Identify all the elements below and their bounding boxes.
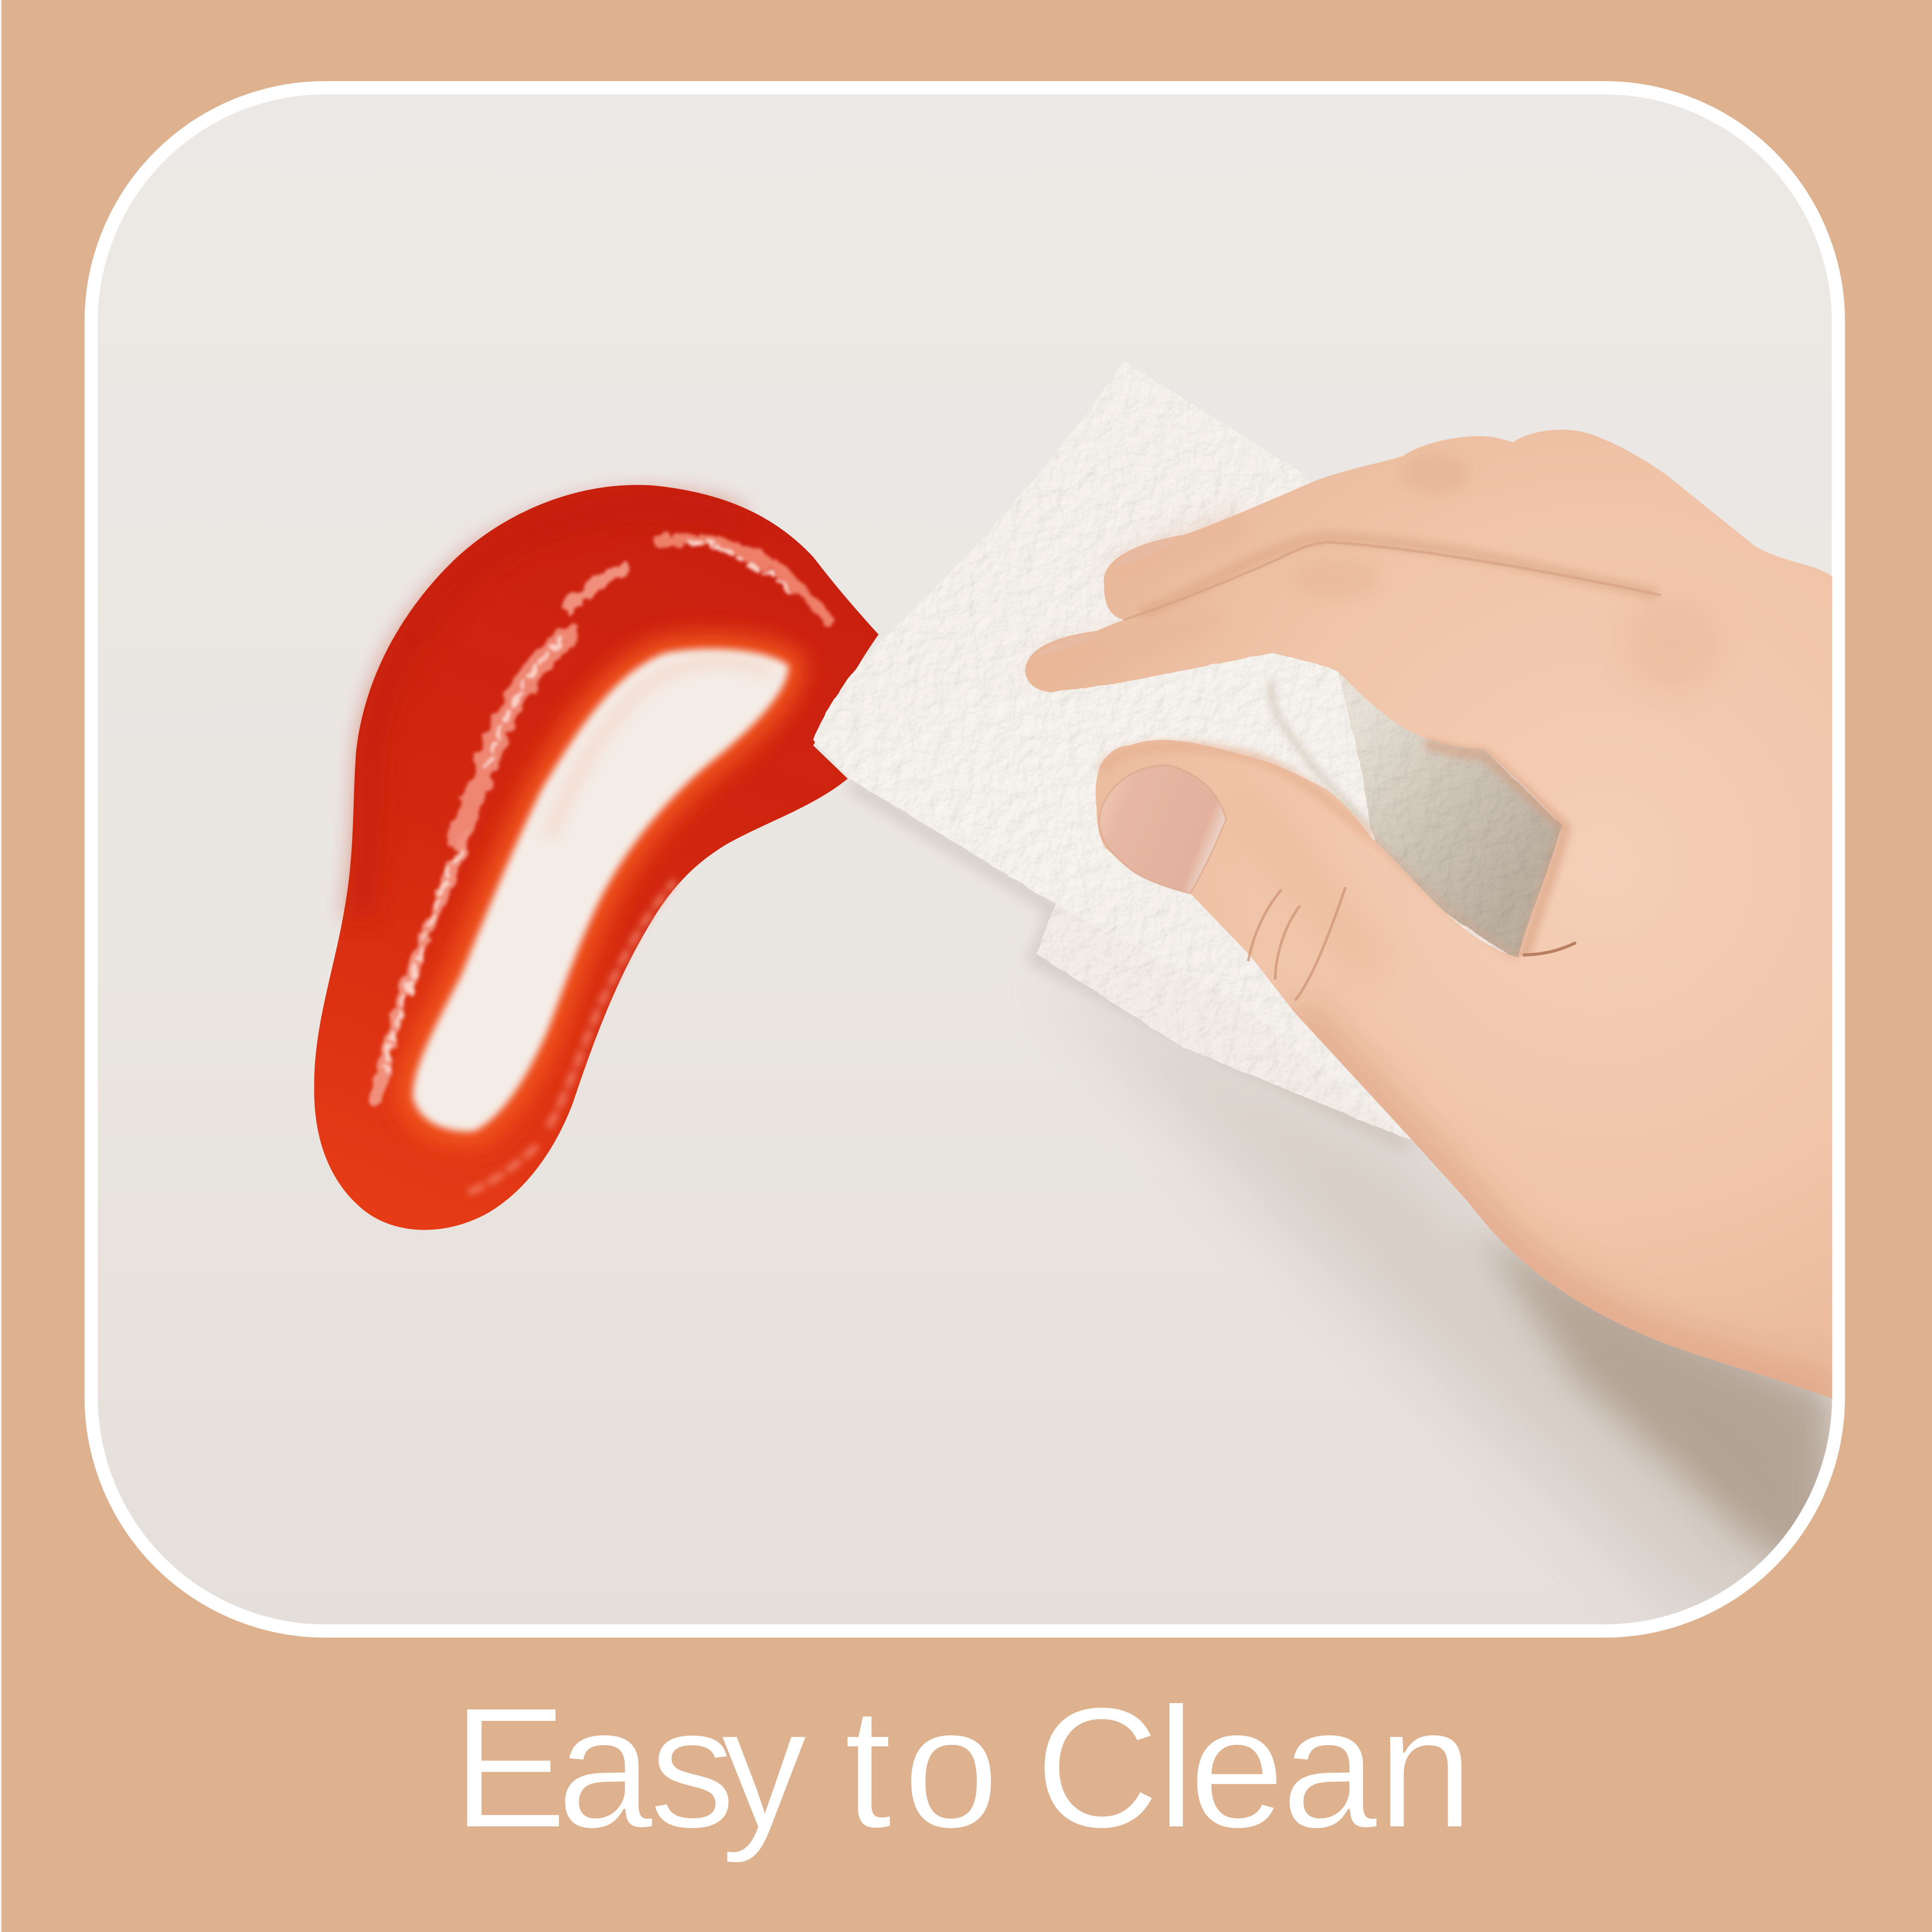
finger parting shade (1140, 537, 1657, 614)
knuckle shadows (1401, 455, 1470, 494)
fingertip tint (1041, 524, 1245, 671)
glossy highlight streaks (376, 540, 828, 1099)
paper towel fold over the fingers (813, 653, 1392, 905)
hand (1025, 430, 1832, 1398)
finger parting crease (1124, 542, 1661, 620)
photo panel (91, 88, 1838, 1631)
thumb body warm tone (1232, 801, 1380, 973)
ketchup smear (314, 485, 878, 1230)
fold crease (1271, 680, 1370, 828)
palm rim shading (1425, 743, 1565, 961)
thumb (1096, 740, 1602, 1203)
thumb knuckle creases (1248, 887, 1346, 1000)
grey shaded paper inside the grip (1338, 671, 1562, 961)
orange halo round wiped area (413, 649, 789, 1131)
thumb tip tint (1103, 747, 1370, 837)
lower edge gloss (468, 881, 675, 1193)
paper towel back sheet (813, 361, 1562, 1140)
photo scene (314, 361, 1832, 1626)
hand lower edge shading (1294, 1012, 1832, 1398)
paper towel soft shadow (850, 784, 1410, 1146)
fingernail: middle (1033, 632, 1105, 657)
fingernail: index (1110, 535, 1184, 571)
caption: Easy to Clean: Easy to Clean (452, 1671, 1473, 1865)
thumb nail (1099, 765, 1226, 893)
web crease (1523, 942, 1576, 955)
hand and paper cast shadow (1100, 1008, 1832, 1618)
wiped clean patch (413, 649, 789, 1131)
smear shading on the outer left (360, 507, 739, 918)
